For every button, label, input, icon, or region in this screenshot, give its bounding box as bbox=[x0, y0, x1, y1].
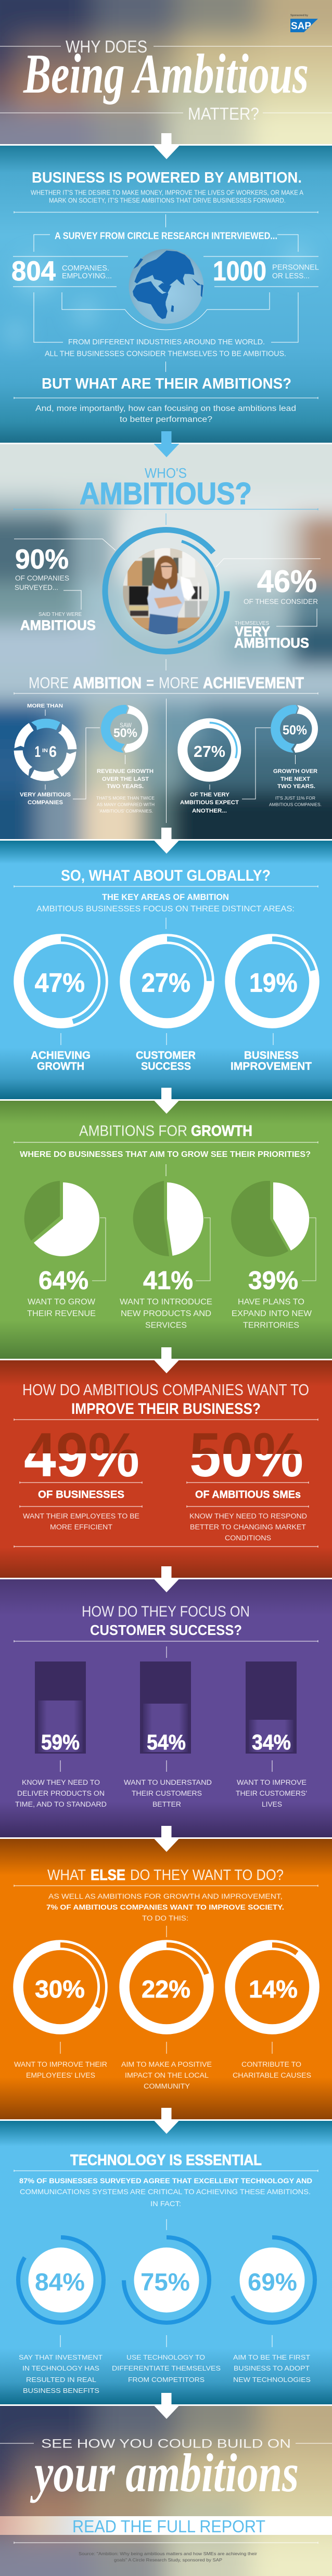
icon: globe bbox=[129, 249, 204, 324]
stat: 1000 personnel bbox=[213, 256, 319, 287]
stat: 90%: OF COMPANIES bbox=[15, 574, 69, 582]
subheading: AMBITIOUS BUSINESSES FOCUS ON THREE DISTINCT AREAS: bbox=[36, 905, 295, 913]
stat: 90%: 90% bbox=[15, 544, 69, 575]
chart: 54% bar: THEIR CUSTOMERS bbox=[132, 1789, 202, 1797]
heading: DO THEY WANT TO DO? bbox=[130, 1867, 284, 1884]
chart: 64% revenue pie: WANT TO GROW bbox=[28, 1297, 95, 1307]
intro text: IN FACT: bbox=[150, 2199, 181, 2208]
stat: 50% of ambitious SMEs: BETTER TO CHANGING MARKET bbox=[190, 1523, 306, 1531]
stat: 1000 personnel: PERSONNEL bbox=[272, 263, 319, 272]
arrow bbox=[154, 1566, 179, 1592]
chart: 34% bar: WANT TO IMPROVE bbox=[237, 1779, 307, 1786]
chart: 59% bar: KNOW THEY NEED TO bbox=[22, 1779, 100, 1786]
sponsor label: Sponsored by bbox=[290, 14, 308, 17]
closing text: ALL THE BUSINESSES CONSIDER THEMSELVES TO BE AMBITIOUS. bbox=[45, 350, 286, 358]
closing text bbox=[45, 338, 286, 358]
source note: Source: "Ambition: Why being ambitious matters and how SMEs are achieving their bbox=[79, 2551, 257, 2556]
text: very ambitious expect: ANOTHER... bbox=[192, 808, 227, 814]
chart: 22% community ring: COMMUNITY bbox=[144, 2082, 190, 2090]
chart: 84% investment: BUSINESS BENEFITS bbox=[23, 2387, 99, 2394]
label: more than: MORE THAN bbox=[27, 703, 63, 709]
chart: 47% achieving growth: GROWTH bbox=[37, 1060, 84, 1073]
intro text bbox=[19, 2176, 312, 2208]
chart: 34% bar: LIVES bbox=[262, 1800, 282, 1808]
chart: 14% charity ring: CONTRIBUTE TO bbox=[241, 2060, 301, 2068]
intro text bbox=[46, 1892, 284, 1922]
button: read the full report: READ THE FULL REPORT bbox=[72, 2517, 265, 2536]
panel: who's ambitious bbox=[0, 431, 332, 839]
heading: TECHNOLOGY IS ESSENTIAL bbox=[70, 2152, 262, 2169]
stat: 49% of businesses: MORE EFFICIENT bbox=[50, 1523, 112, 1531]
text: revenue growth: AS MANY COMPARED WITH bbox=[97, 802, 155, 807]
text: growth over next two years: GROWTH OVER bbox=[273, 768, 317, 775]
chart: 1 in 6 ring: 6 bbox=[49, 743, 57, 761]
chart: 39% territories pie: EXPAND INTO NEW bbox=[232, 1309, 312, 1318]
chart: 34% bar: 34% bbox=[252, 1730, 291, 1754]
chart: 39% territories pie: 39% bbox=[248, 1267, 298, 1295]
stat: 49% of businesses: WANT THEIR EMPLOYEES TO BE bbox=[23, 1512, 139, 1520]
arrow bbox=[154, 1826, 179, 1852]
arrow bbox=[154, 133, 179, 159]
chart: 64% revenue pie: THEIR REVENUE bbox=[27, 1309, 96, 1318]
panel: global key areas bbox=[0, 828, 332, 1099]
stat: 50% of ambitious SMEs: 50% bbox=[189, 1420, 303, 1490]
text: revenue growth: REVENUE GROWTH bbox=[97, 768, 154, 775]
stat: 49% of businesses: 49% bbox=[24, 1420, 139, 1490]
chart: 64% revenue pie: 64% bbox=[39, 1267, 88, 1295]
chart: 34% bar: THEIR CUSTOMERS' bbox=[236, 1789, 307, 1797]
chart: 22% community ring: AIM TO MAKE A POSITIVE bbox=[121, 2060, 212, 2068]
text: revenue growth bbox=[96, 768, 155, 814]
stat: 1000 personnel: 1000 bbox=[213, 256, 266, 287]
chart: 69% first to adopt: NEW TECHNOLOGIES bbox=[233, 2376, 311, 2384]
stat: 804 companies: EMPLOYING... bbox=[62, 272, 112, 280]
chart: 59% bar: DELIVER PRODUCTS ON bbox=[17, 1789, 105, 1797]
chart: 30% employees ring: EMPLOYEES' LIVES bbox=[26, 2071, 95, 2079]
text: growth over next two years: AMBITIOUS COMPANIES. bbox=[269, 802, 322, 807]
chart: 84% investment: 84% bbox=[35, 2268, 85, 2296]
stat: 50% of ambitious SMEs: OF AMBITIOUS SMEs bbox=[195, 1489, 301, 1500]
icon: SAP logo bbox=[290, 19, 318, 32]
heading: IMPROVE THEIR BUSINESS? bbox=[71, 1400, 261, 1418]
chart: 30% employees ring: 30% bbox=[35, 1975, 85, 2003]
intro text bbox=[31, 188, 303, 204]
chart: 1 in 6 ring: 1 bbox=[34, 743, 41, 761]
chart: 69% first to adopt: BUSINESS TO ADOPT bbox=[234, 2364, 310, 2372]
stat: 804 companies bbox=[11, 256, 112, 287]
heading: more ambition = more achievement: MORE bbox=[29, 674, 69, 692]
stat: 49% of businesses: OF BUSINESSES bbox=[38, 1489, 124, 1500]
panel: what else bbox=[0, 1826, 332, 2119]
stat: 46%: AMBITIOUS bbox=[234, 635, 309, 651]
chart: 27% ring bbox=[183, 723, 237, 777]
chart: 41% products pie: SERVICES bbox=[145, 1321, 187, 1330]
arrow bbox=[154, 828, 179, 854]
chart: 27% ring: 27% bbox=[194, 742, 225, 761]
chart: 50% revenue donut bbox=[101, 705, 148, 753]
panel: call to action footer bbox=[0, 2393, 332, 2576]
intro text: AS WELL AS AMBITIONS FOR GROWTH AND IMPROVEMENT, bbox=[48, 1892, 283, 1900]
text: growth over next two years: TWO YEARS. bbox=[277, 783, 315, 790]
photo: woman in office bbox=[123, 548, 209, 636]
chart: 54% bar: BETTER bbox=[152, 1800, 181, 1808]
chart: 54% bar bbox=[124, 1661, 212, 1808]
chart: 39% territories pie: TERRITORIES bbox=[243, 1321, 299, 1330]
chart: 22% community ring: IMPACT ON THE LOCAL bbox=[125, 2071, 209, 2079]
intro text: 7% OF AMBITIOUS COMPANIES WANT TO IMPROVE SOCIETY. bbox=[46, 1903, 284, 1911]
stat: 90%: AMBITIOUS bbox=[20, 617, 96, 633]
chart: 22% community ring bbox=[121, 1945, 212, 2090]
stat: 49% of businesses: 49% bbox=[24, 1420, 139, 1490]
intro text: WHETHER IT'S THE DESIRE TO MAKE MONEY, IMPROVE THE LIVES OF WORKERS, OR MAKE A bbox=[31, 188, 303, 197]
stat: 46%: THEMSELVES bbox=[235, 620, 269, 626]
stat: 46%: VERY bbox=[235, 624, 270, 639]
title line: why does: WHY DOES bbox=[66, 37, 147, 56]
intro text: 87% OF BUSINESSES SURVEYED AGREE THAT EXCELLENT TECHNOLOGY AND bbox=[19, 2176, 312, 2185]
label: very ambitious companies bbox=[20, 792, 71, 806]
chart: 69% first to adopt: AIM TO BE THE FIRST bbox=[233, 2353, 310, 2361]
chart: 59% bar bbox=[15, 1661, 107, 1808]
heading bbox=[47, 1867, 284, 1884]
chart: 27% customer success: SUCCESS bbox=[141, 1060, 191, 1073]
stat: 804 companies: COMPANIES. bbox=[62, 264, 109, 273]
heading: AMBITIONS FOR bbox=[79, 1123, 187, 1139]
chart: 19% business improvement: IMPROVEMENT bbox=[231, 1060, 312, 1073]
chart: 27% customer success: 27% bbox=[142, 968, 190, 998]
chart: 54% bar: WANT TO UNDERSTAND bbox=[124, 1779, 212, 1786]
icon: photo ring bbox=[105, 530, 227, 652]
text: very ambitious expect: OF THE VERY bbox=[190, 792, 230, 798]
text: growth over next two years: THE NEXT bbox=[280, 776, 310, 782]
text: revenue growth: 'AMBITIOUS' COMPANIES. bbox=[99, 808, 153, 814]
heading: more ambition = more achievement bbox=[29, 674, 304, 692]
heading: GROWTH bbox=[191, 1123, 252, 1139]
heading: ambitious: AMBITIOUS? bbox=[80, 476, 252, 511]
text: very ambitious expect: AMBITIOUS EXPECT bbox=[180, 800, 239, 806]
chart: 75% differentiate: USE TECHNOLOGY TO bbox=[126, 2353, 205, 2361]
heading bbox=[22, 1381, 309, 1418]
intro text: MARK ON SOCIETY, IT'S THESE AMBITIONS THAT DRIVE BUSINESSES FORWARD. bbox=[49, 197, 286, 204]
chart: 75% differentiate: DIFFERENTIATE THEMSELVES bbox=[112, 2364, 221, 2372]
chart: 84% investment: IN TECHNOLOGY HAS bbox=[22, 2364, 99, 2372]
chart: 30% employees ring bbox=[14, 1945, 107, 2079]
closing text: FROM DIFFERENT INDUSTRIES AROUND THE WORLD. bbox=[68, 338, 265, 346]
subheading: WHERE DO BUSINESSES THAT AIM TO GROW SEE THEIR PRIORITIES? bbox=[20, 1150, 311, 1159]
heading: more ambition = more achievement: AMBITION bbox=[73, 674, 142, 692]
chart: 47% achieving growth bbox=[19, 939, 103, 1073]
chart: 1 in 6 ring bbox=[11, 719, 80, 781]
icon: SAP logo: SAP bbox=[291, 21, 311, 32]
panel: ambitions for growth bbox=[0, 1088, 332, 1359]
stat: 46%: OF THESE CONSIDER bbox=[244, 598, 318, 606]
chart: 30% employees ring: WANT TO IMPROVE THEIR bbox=[14, 2060, 107, 2068]
arrow bbox=[154, 1088, 179, 1114]
chart: 39% territories pie: HAVE PLANS TO bbox=[238, 1297, 304, 1307]
subheading: THE KEY AREAS OF AMBITION bbox=[102, 893, 229, 902]
source note: goals" A Circle Research Study, sponsored by SAP bbox=[114, 2557, 222, 2562]
heading: ELSE bbox=[91, 1867, 125, 1884]
button: read the full report bbox=[0, 2516, 332, 2536]
heading: HOW DO THEY FOCUS ON bbox=[82, 1603, 250, 1620]
chart: 39% territories pie bbox=[231, 1181, 312, 1330]
chart: 19% business improvement: BUSINESS bbox=[244, 1050, 299, 1061]
stat: 90% bbox=[15, 544, 96, 633]
heading: more ambition = more achievement: ACHIEVEMENT bbox=[203, 674, 304, 692]
chart: 47% achieving growth: 47% bbox=[35, 968, 85, 998]
arrow bbox=[154, 2108, 179, 2134]
stat: 90%: SAID THEY WERE bbox=[39, 611, 82, 617]
label: very ambitious companies: COMPANIES bbox=[28, 800, 63, 806]
chart: 69% first to adopt: 69% bbox=[248, 2268, 297, 2296]
stat: 50% of ambitious SMEs bbox=[190, 1433, 307, 1540]
chart: 27% customer success: CUSTOMER bbox=[136, 1050, 196, 1061]
question subtext: And, more importantly, how can focusing on those ambitions lead bbox=[35, 404, 296, 413]
chart: 19% business improvement: 19% bbox=[249, 968, 298, 998]
chart: 47% achieving growth: ACHIEVING bbox=[31, 1050, 91, 1061]
stat: 50% of ambitious SMEs: KNOW THEY NEED TO RESPOND bbox=[189, 1512, 307, 1520]
heading: more ambition = more achievement: MORE bbox=[159, 674, 199, 692]
chart: 50% growth donut bbox=[271, 705, 318, 753]
chart: 41% products pie: WANT TO INTRODUCE bbox=[120, 1297, 212, 1307]
heading: see how: SEE HOW YOU COULD BUILD ON bbox=[41, 2437, 291, 2451]
heading: more ambition = more achievement: = bbox=[146, 674, 154, 692]
panel: technology is essential bbox=[0, 2108, 332, 2405]
subheading bbox=[36, 893, 295, 913]
chart: 27% customer success bbox=[125, 939, 209, 1073]
chart: 64% revenue pie bbox=[24, 1181, 99, 1318]
title line: matter: MATTER? bbox=[188, 104, 259, 123]
chart: 14% charity ring: 14% bbox=[249, 1975, 298, 2003]
label: very ambitious companies: VERY AMBITIOUS bbox=[20, 792, 71, 798]
chart: 75% differentiate: 75% bbox=[141, 2268, 190, 2296]
panel: survey introduction bbox=[0, 133, 332, 443]
stat: 46% bbox=[234, 564, 318, 651]
question subtext: to better performance? bbox=[120, 415, 212, 424]
chart: 14% charity ring bbox=[230, 1945, 314, 2079]
chart: 22% community ring: 22% bbox=[142, 1975, 190, 2003]
arrow bbox=[154, 431, 179, 457]
panel: title header bbox=[0, 0, 332, 144]
source note bbox=[79, 2551, 257, 2562]
stat: 50% of ambitious SMEs: CONDITIONS bbox=[225, 1534, 271, 1542]
heading bbox=[79, 1123, 252, 1139]
arrow bbox=[154, 1347, 179, 1373]
chart: 84% investment: RESULTED IN REAL bbox=[26, 2376, 96, 2384]
chart: 59% bar: 59% bbox=[41, 1730, 80, 1754]
question subtext bbox=[35, 404, 296, 424]
chart: 50% revenue donut: SAW bbox=[120, 722, 132, 729]
question heading: BUT WHAT ARE THEIR AMBITIONS? bbox=[42, 376, 291, 392]
panel: customer success bbox=[0, 1566, 332, 1838]
intro text: TO DO THIS: bbox=[142, 1914, 188, 1922]
chart: 54% bar: 54% bbox=[147, 1730, 186, 1754]
chart: 41% products pie: 41% bbox=[143, 1267, 193, 1295]
heading: BUSINESS IS POWERED BY AMBITION. bbox=[32, 170, 302, 186]
chart: 84% investment: SAY THAT INVESTMENT bbox=[19, 2353, 103, 2361]
stat: 1000 personnel: OR LESS... bbox=[272, 272, 310, 280]
chart: 75% differentiate bbox=[112, 2237, 221, 2384]
text: revenue growth: OVER THE LAST bbox=[102, 776, 149, 782]
heading bbox=[82, 1603, 250, 1638]
text: very ambitious expect bbox=[180, 792, 239, 814]
text: revenue growth: TWO YEARS. bbox=[107, 783, 144, 790]
arrow bbox=[154, 2393, 179, 2419]
text: growth over next two years: IT'S JUST 11% FOR bbox=[275, 795, 315, 801]
stat: 50% of ambitious SMEs: 50% bbox=[189, 1420, 303, 1490]
chart: 19% business improvement bbox=[230, 939, 314, 1073]
text: growth over next two years bbox=[269, 768, 322, 807]
chart: 34% bar bbox=[236, 1661, 307, 1808]
chart: 50% revenue donut: 50% bbox=[113, 726, 137, 740]
chart: 75% differentiate: FROM COMPETITORS bbox=[128, 2376, 205, 2384]
stat: 46%: 46% bbox=[257, 564, 317, 599]
stat: 49% of businesses bbox=[23, 1433, 139, 1529]
chart: 59% bar: TIME, AND TO STANDARD bbox=[15, 1800, 107, 1808]
stat: 804 companies: 804 bbox=[11, 256, 56, 287]
intro text: COMMUNICATIONS SYSTEMS ARE CRITICAL TO ACHIEVING THESE AMBITIONS. bbox=[20, 2187, 311, 2196]
stat: 90%: SURVEYED... bbox=[15, 584, 58, 591]
chart: 50% growth donut: 50% bbox=[283, 723, 307, 738]
chart: 14% charity ring: CHARITABLE CAUSES bbox=[233, 2071, 311, 2079]
chart: 84% investment bbox=[18, 2237, 104, 2394]
chart: 41% products pie: NEW PRODUCTS AND bbox=[121, 1309, 211, 1318]
heading: WHAT bbox=[47, 1867, 86, 1884]
heading: CUSTOMER SUCCESS? bbox=[90, 1622, 242, 1638]
text: revenue growth: THAT'S MORE THAN TWICE bbox=[96, 795, 155, 801]
heading: who's: WHO'S bbox=[145, 465, 187, 481]
survey heading: A SURVEY FROM CIRCLE RESEARCH INTERVIEWED... bbox=[55, 231, 277, 241]
chart: 1 in 6 ring: IN bbox=[42, 748, 48, 754]
panel: improve their business bbox=[0, 1347, 332, 1578]
chart: 41% products pie bbox=[120, 1181, 212, 1330]
chart: 69% first to adopt bbox=[229, 2237, 315, 2384]
heading: SO, WHAT ABOUT GLOBALLY? bbox=[61, 867, 271, 884]
